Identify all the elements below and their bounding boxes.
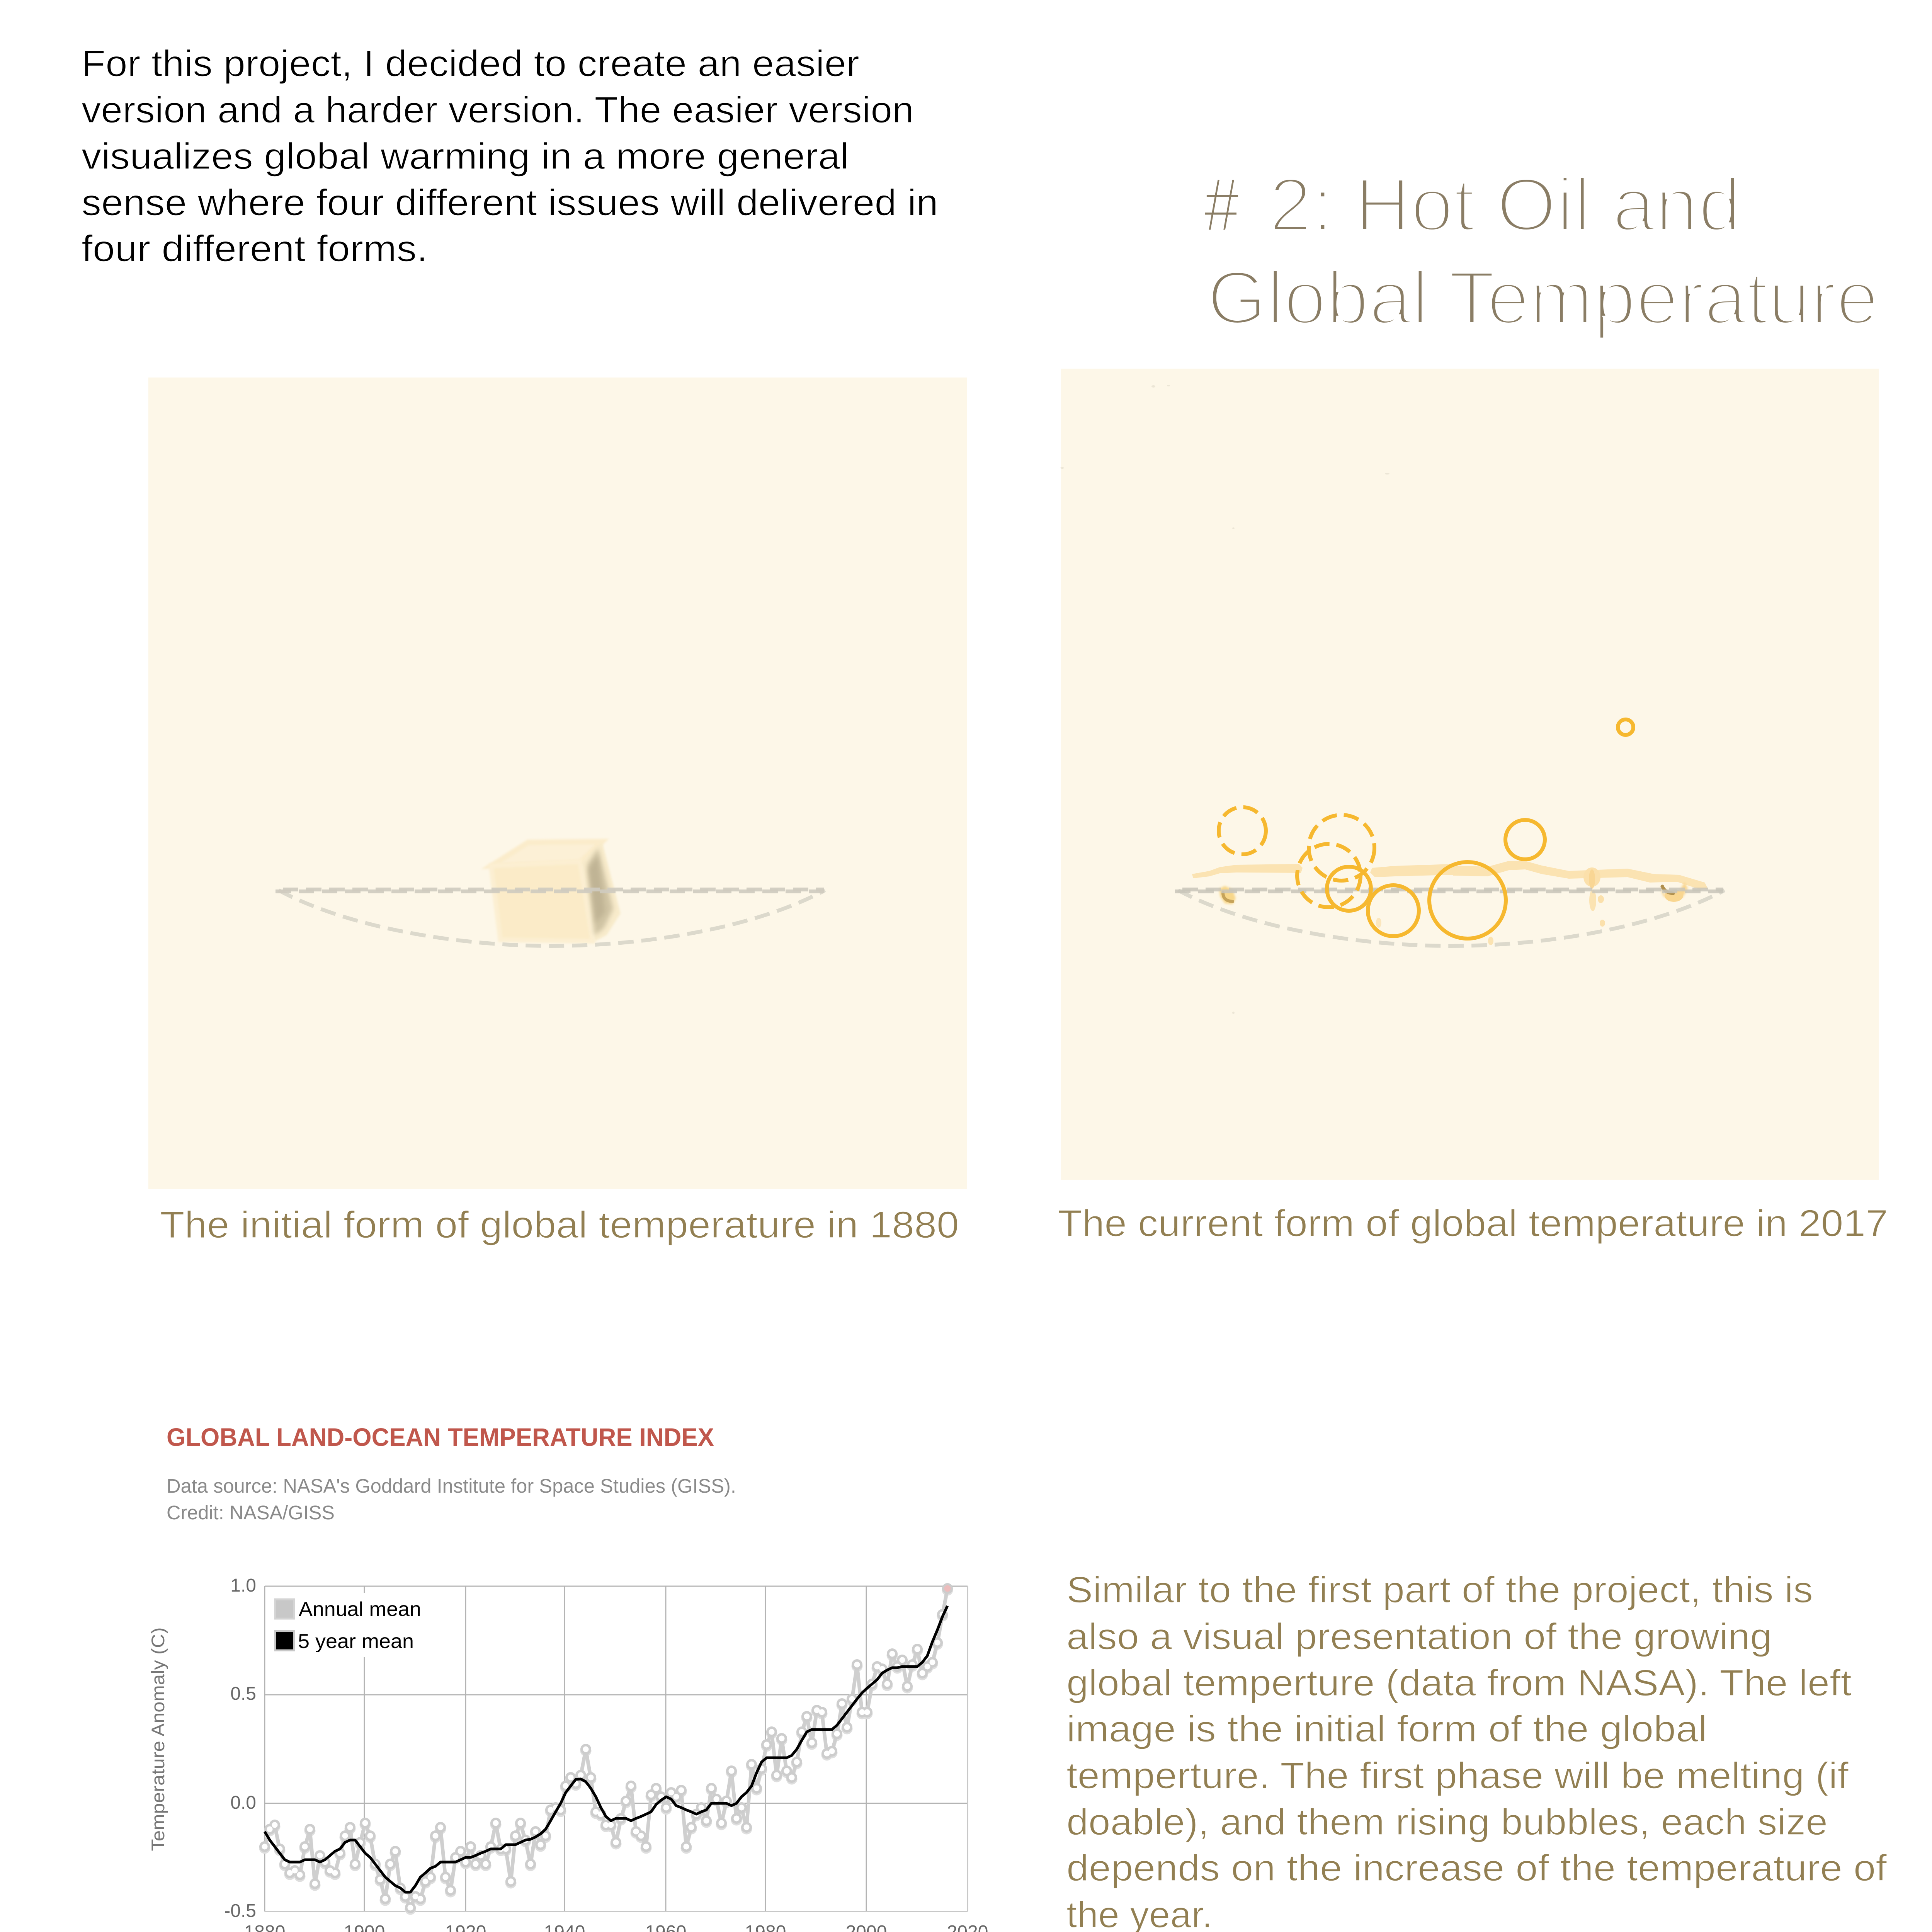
legend: Annual mean — [299, 1598, 421, 1621]
panel: initial form 1880 — [148, 378, 967, 1189]
panel: current form 2017 — [1060, 369, 1879, 1180]
title: # — [1204, 162, 1239, 247]
y axis tick labels: -0.5 — [224, 1901, 256, 1921]
description text block — [1066, 1569, 1887, 1932]
icon: pan outline — [276, 889, 825, 946]
legend — [270, 1593, 425, 1657]
intro text block: visualizes global warming in a more general — [82, 136, 849, 177]
specks — [1060, 385, 1389, 1014]
intro text block: version and a harder version. The easier version — [82, 89, 914, 131]
description text block: temperture. The first phase will be melting (if — [1066, 1755, 1849, 1796]
icon: dashed bubbles — [1219, 807, 1374, 907]
y axis title: Temperature Anomaly (C) — [148, 1628, 168, 1851]
y axis tick labels: 0.0 — [230, 1793, 256, 1813]
chart: global land-ocean temperature index — [148, 1423, 988, 1932]
x axis tick labels — [244, 1922, 988, 1932]
annual mean series — [265, 1588, 947, 1909]
description text block: global temperture (data from NASA). The left — [1066, 1662, 1852, 1704]
chart source credit — [167, 1475, 736, 1524]
description text block: Similar to the first part of the project, this is — [1066, 1569, 1813, 1611]
five year mean line — [265, 1606, 947, 1892]
y axis tick labels — [224, 1575, 256, 1921]
icon: pan outline — [1175, 889, 1725, 946]
y axis tick labels: 0.5 — [230, 1684, 256, 1704]
intro text block: four different forms. — [82, 228, 428, 269]
description text block: image is the initial form of the global — [1066, 1708, 1707, 1750]
intro text block — [82, 43, 938, 269]
description text block: also a visual presentation of the growing — [1066, 1616, 1772, 1657]
title — [1204, 162, 1879, 340]
caption: 2017: The current form of global temperature in 2017 — [1058, 1202, 1888, 1244]
description text block: doable), and them rising bubbles, each size — [1066, 1801, 1828, 1843]
chart title: GLOBAL LAND-OCEAN TEMPERATURE INDEX — [167, 1423, 714, 1451]
icon: solid bubbles — [1327, 719, 1633, 939]
icon: ice cube — [491, 842, 621, 941]
chart source credit: Credit: NASA/GISS — [167, 1502, 335, 1524]
icon: oil blobs — [1219, 867, 1688, 945]
intro text block: For this project, I decided to create an easier — [82, 43, 859, 84]
chart source credit: Data source: NASA's Goddard Institute for Space Studies (GISS). — [167, 1475, 736, 1497]
title: 2: Hot Oil and — [1269, 162, 1741, 247]
legend: 5 year mean — [298, 1630, 414, 1653]
icon: melted oil band — [1192, 861, 1708, 889]
caption: 1880: The initial form of global temperature in 1880 — [160, 1204, 959, 1246]
y axis tick labels: 1.0 — [230, 1575, 256, 1596]
description text block: depends on the increase of the temperature of — [1066, 1847, 1887, 1889]
intro text block: sense where four different issues will delivered in — [82, 182, 938, 223]
chart gridlines — [265, 1586, 968, 1912]
title: Global Temperature — [1207, 255, 1879, 340]
